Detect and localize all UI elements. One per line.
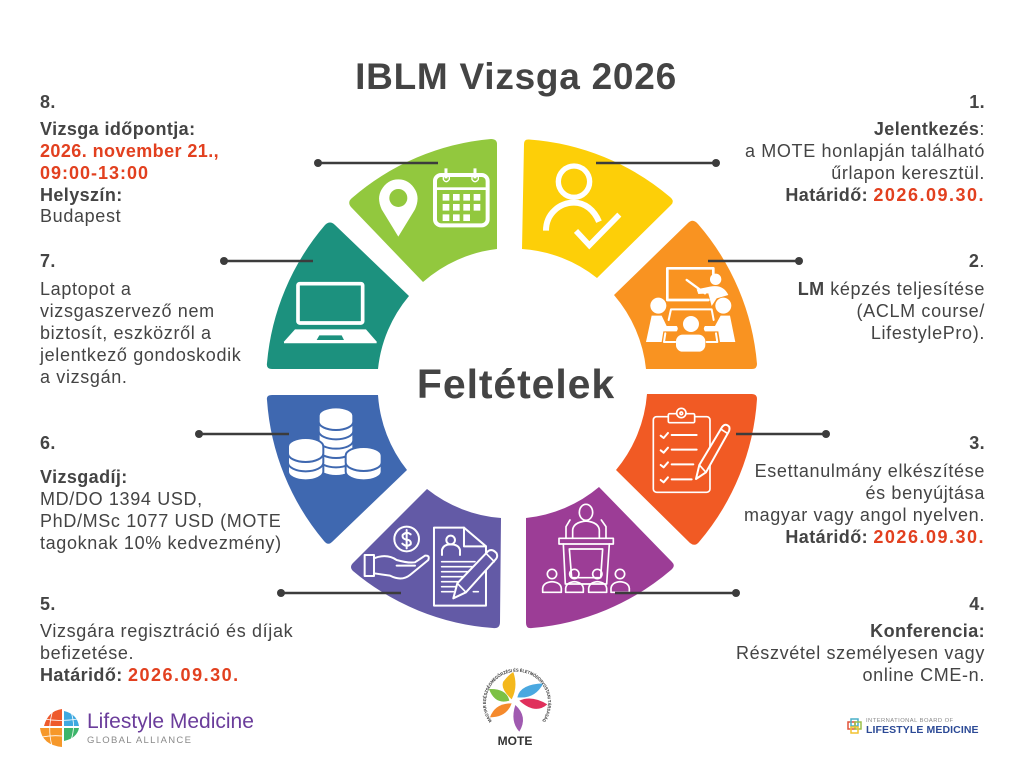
text block 6: exam fee: MD/DO 1394 USD,: [40, 489, 203, 509]
text block 3: case study: 3.: [969, 433, 985, 453]
text block 6: exam fee: Vizsgadíj:: [40, 467, 128, 487]
text block 2: LM training: LifestylePro).: [871, 323, 985, 343]
text block 4: conference: Részvétel személyesen vagy: [736, 643, 985, 663]
connector 6: [195, 430, 289, 438]
segment 7: teal with laptop icon: [267, 222, 409, 369]
center heading: Feltételek: [417, 361, 615, 407]
text block 5: registration: Határidő: 2026.09.30.: [40, 665, 240, 685]
logo: Lifestyle Medicine Global Alliance: [40, 709, 254, 747]
segment 8: green with map pin and calendar icons: [349, 139, 497, 282]
text block 7: laptop: jelentkező gondoskodik: [39, 345, 242, 365]
logo: MOTE flower: MAGYAR EGÉSZSÉGMEGŐRZÉSI ÉS ÉLETMÓDORVOSTANI TÁRSASÁG: [482, 668, 552, 723]
text block 8: exam date and place: 2026. november 21.,: [40, 141, 219, 161]
text block 4: conference: [736, 594, 985, 685]
text block 7: laptop: vizsgaszervező nem: [40, 301, 215, 321]
text block 6: exam fee: [40, 433, 282, 553]
text block 7: laptop: biztosít, eszközről a: [40, 323, 212, 343]
text block 3: case study: magyar vagy angol nyelven.: [744, 505, 985, 525]
segment 6: blue with coin stacks icon: [267, 395, 407, 544]
text block 3: case study: Határidő: 2026.09.30.: [785, 527, 985, 547]
text block 5: registration: 5.: [40, 594, 56, 614]
text block 8: exam date and place: 09:00-13:00: [40, 163, 149, 183]
text block 5: registration: [40, 594, 294, 685]
text block 2: LM training: (ACLM course/: [857, 301, 985, 321]
logo: International Board of Lifestyle Medicine: [848, 718, 979, 736]
connector 7: [220, 257, 313, 265]
text block 7: laptop: a vizsgán.: [40, 367, 128, 387]
text block 8: exam date and place: [40, 92, 219, 226]
title: IBLM Vizsga 2026: [355, 56, 677, 97]
text block 3: case study: [744, 433, 985, 547]
text block 5: registration: befizetése.: [40, 643, 134, 663]
connector 3: [736, 430, 830, 438]
text block 3: case study: és benyújtása: [865, 483, 985, 503]
connector 1: [596, 159, 720, 167]
text block 1: application: űrlapon keresztül.: [831, 163, 985, 183]
logo: International Board of Lifestyle Medicine: INTERNATIONAL BOARD OF: [866, 718, 954, 724]
text block 2: LM training: 2.: [969, 251, 985, 271]
text block 4: conference: Konferencia:: [870, 621, 985, 641]
text block 1: application: Határidő: 2026.09.30.: [785, 185, 985, 205]
connector 4: [615, 589, 740, 597]
text block 6: exam fee: tagoknak 10% kedvezmény): [40, 533, 282, 553]
text block 1: application: a MOTE honlapján található: [745, 141, 985, 161]
text block 7: laptop: 7.: [40, 251, 56, 271]
logo: MOTE flower: [482, 668, 552, 748]
text block 7: laptop: Laptopot a: [40, 279, 132, 299]
text block 8: exam date and place: 8.: [40, 92, 56, 112]
logo: Lifestyle Medicine Global Alliance: GLOBAL ALLIANCE: [87, 735, 192, 746]
text block 1: application: Jelentkezés:: [874, 119, 985, 139]
segment 2: orange with classroom icon: [614, 221, 757, 369]
text block 5: registration: Vizsgára regisztráció és díjak: [40, 621, 294, 641]
text block 2: LM training: LM képzés teljesítése: [798, 279, 985, 299]
logo: Lifestyle Medicine Global Alliance: Lifestyle Medicine: [87, 710, 254, 733]
segment 1: yellow with person check icon: [522, 139, 673, 278]
logo: International Board of Lifestyle Medicine: LIFESTYLE MEDICINE: [866, 724, 979, 736]
text block 3: case study: Esettanulmány elkészítése: [755, 461, 985, 481]
connector 5: [277, 589, 401, 597]
text block 8: exam date and place: Helyszín:: [40, 185, 123, 205]
connector 8: [314, 159, 438, 167]
text block 1: application: [745, 92, 985, 205]
text block 1: application: 1.: [969, 92, 985, 112]
text block 2: LM training: [798, 251, 985, 343]
text block 6: exam fee: PhD/MSc 1077 USD (MOTE: [40, 511, 281, 531]
text block 8: exam date and place: Budapest: [40, 206, 121, 226]
text block 4: conference: online CME-n.: [862, 665, 985, 685]
text block 8: exam date and place: Vizsga időpontja:: [40, 119, 195, 139]
text block 7: laptop: [39, 251, 242, 387]
segment 3: red-orange with checklist icon: [616, 394, 757, 545]
text block 4: conference: 4.: [969, 594, 985, 614]
segment 4: magenta with conference podium icon: [526, 487, 674, 628]
connector 2: [708, 257, 803, 265]
segment 5: purple with payment and document icon: [351, 489, 501, 628]
text block 6: exam fee: 6.: [40, 433, 56, 453]
logo: MOTE flower: MOTE: [498, 734, 532, 748]
